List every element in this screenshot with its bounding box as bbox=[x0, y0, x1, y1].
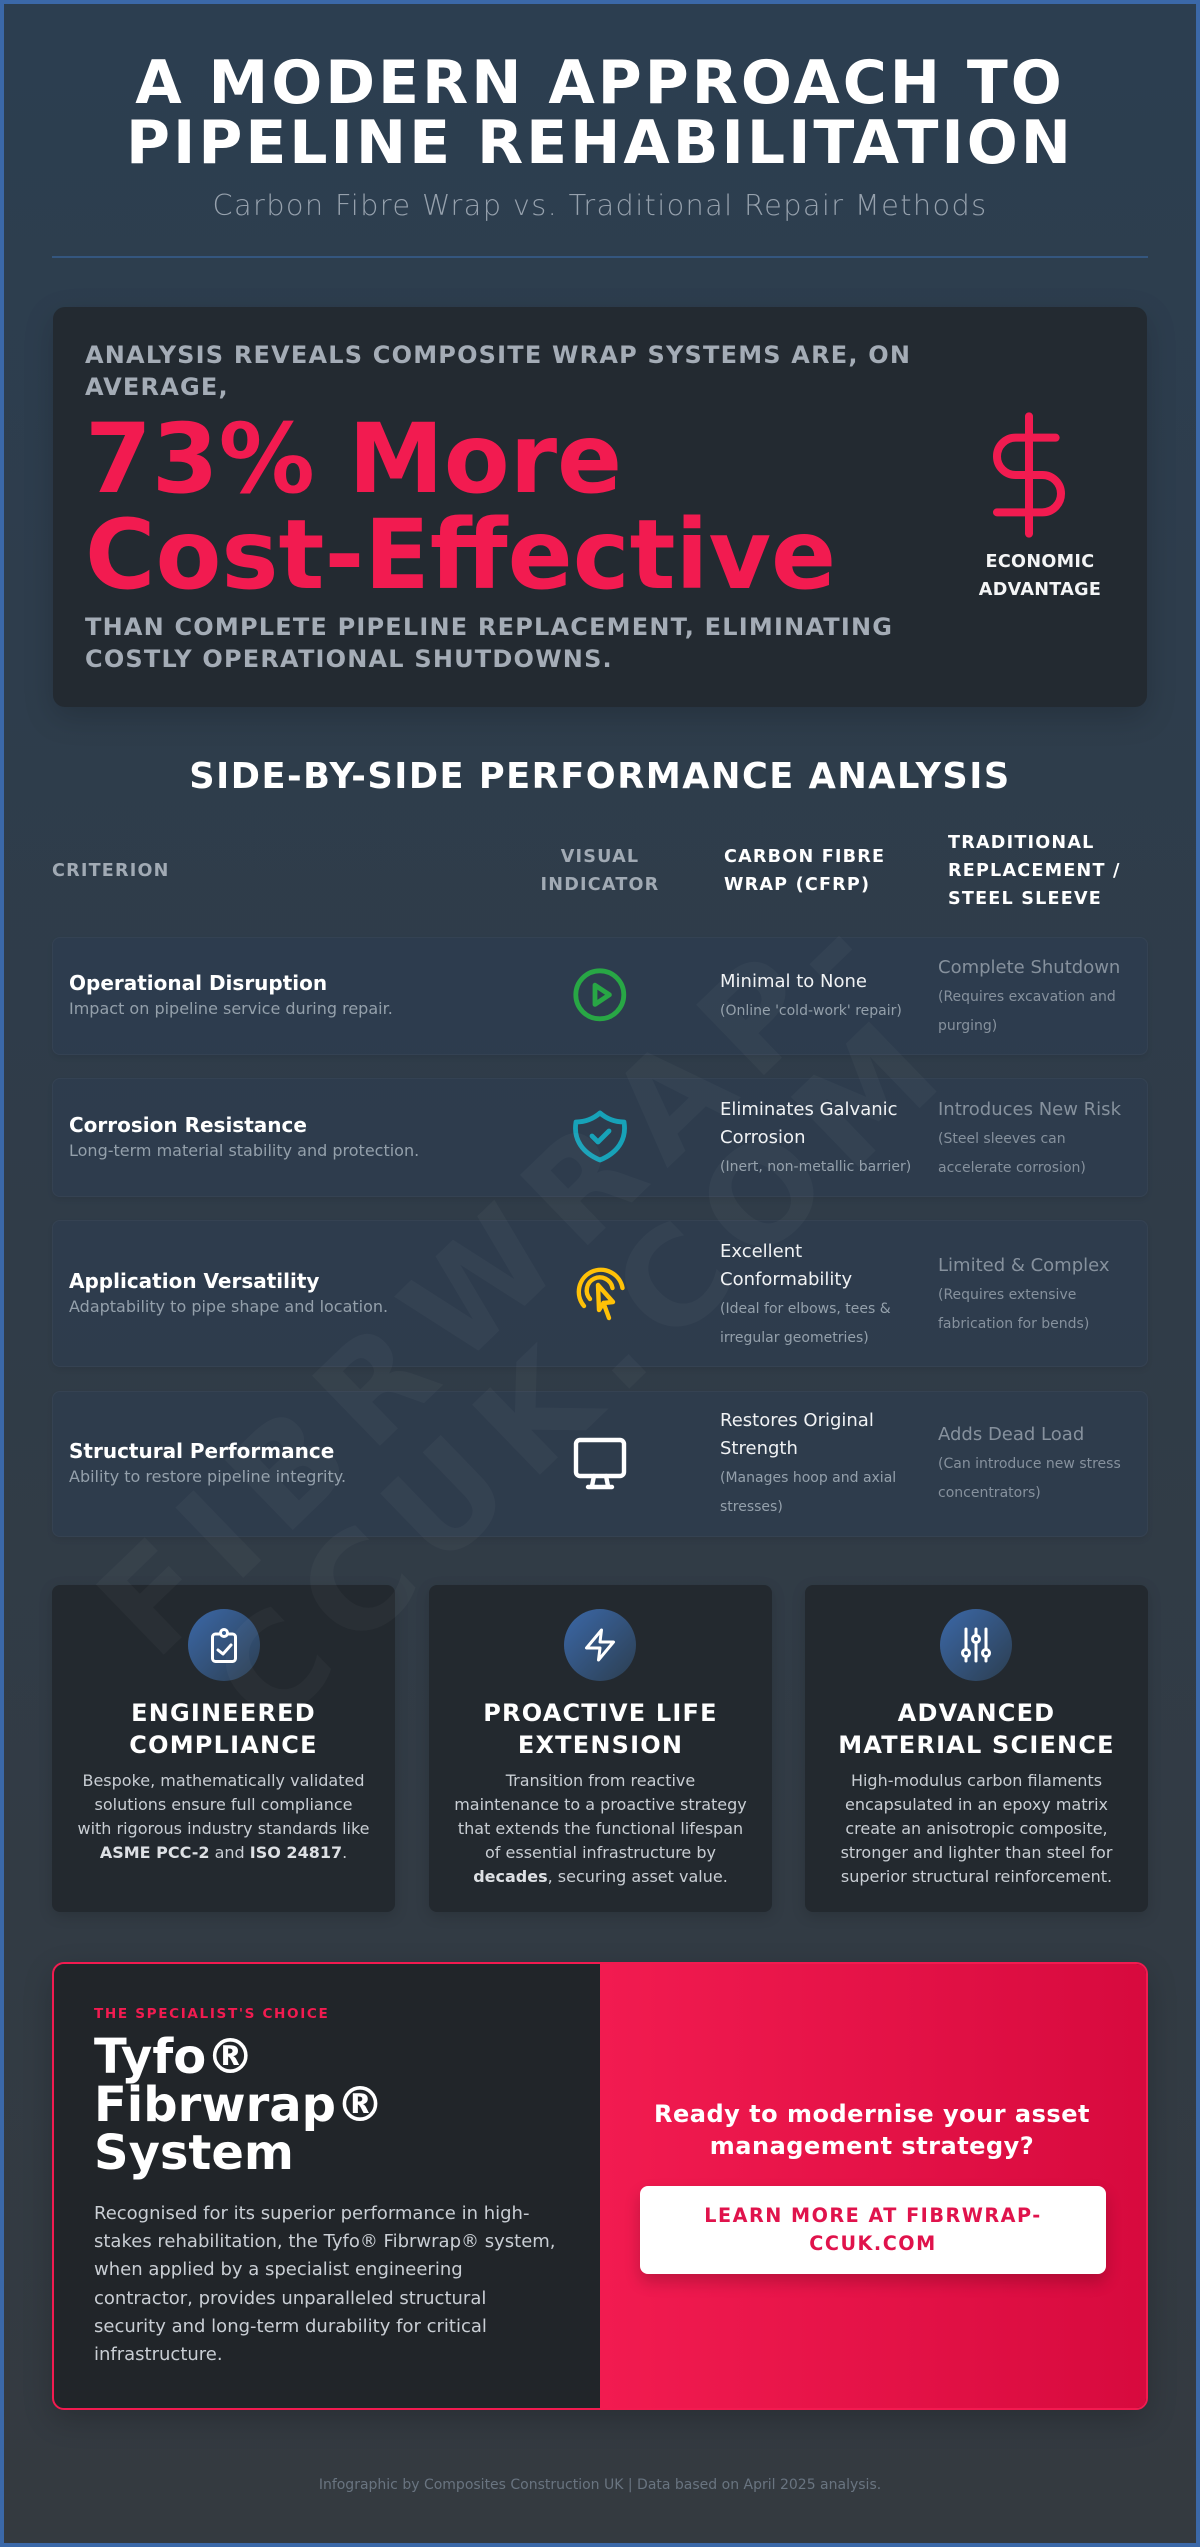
carbon fibre: excellent conformability: (Ideal for elbows, tees & bbox=[720, 1301, 891, 1317]
button: learn more: LEARN MORE AT FIBRWRAP- bbox=[704, 2204, 1042, 2227]
carbon fibre: minimal to none bbox=[720, 971, 902, 1019]
panel: engineered compliance bbox=[52, 1585, 395, 1912]
icon: clipboard check bbox=[188, 1609, 260, 1681]
criterion: structural performance: Ability to restore pipeline integrity. bbox=[69, 1467, 346, 1486]
hero closing text: THAN COMPLETE PIPELINE REPLACEMENT, ELIMINATING bbox=[85, 613, 893, 641]
label: economic advantage: ECONOMIC bbox=[986, 552, 1094, 572]
heading: proactive life extension: EXTENSION bbox=[518, 1731, 683, 1759]
button: learn more: CCUK.COM bbox=[809, 2232, 937, 2255]
criterion: corrosion resistance bbox=[69, 1113, 419, 1160]
table header: visual indicator: INDICATOR bbox=[541, 875, 659, 895]
watermark: FIBRWRAP- bbox=[69, 863, 914, 1686]
product name bbox=[94, 2029, 384, 2181]
body: engineered compliance bbox=[77, 1771, 370, 1862]
footer credit: Infographic by Composites Construction UK | Data based on April 2025 analysis. bbox=[319, 2477, 881, 2493]
body: proactive life extension: that extends the functional lifespan bbox=[458, 1819, 743, 1838]
traditional: adds dead load bbox=[938, 1424, 1121, 1501]
traditional: complete shutdown: purging) bbox=[938, 1018, 997, 1034]
body: advanced material science: stronger and lighter than steel for bbox=[841, 1843, 1112, 1862]
table header: visual indicator: VISUAL bbox=[561, 847, 639, 867]
carbon fibre: restores original strength: Restores Original bbox=[720, 1410, 874, 1431]
product description: Recognised for its superior performance in high- bbox=[94, 2203, 529, 2224]
heading: proactive life extension bbox=[483, 1699, 718, 1759]
icon: cursor click bbox=[576, 1268, 625, 1320]
panel: advanced material science bbox=[805, 1585, 1148, 1912]
table header: visual indicator bbox=[541, 847, 659, 895]
heading: engineered compliance: ENGINEERED bbox=[131, 1699, 316, 1727]
body: engineered compliance: solutions ensure full compliance bbox=[95, 1795, 352, 1814]
product description: when applied by a specialist engineering bbox=[94, 2259, 463, 2280]
traditional: complete shutdown bbox=[938, 957, 1120, 1034]
call to action question: Ready to modernise your asset bbox=[654, 2100, 1090, 2128]
criterion: application versatility: Application Versatility bbox=[69, 1269, 319, 1293]
table header: carbon fibre wrap: WRAP (CFRP) bbox=[724, 875, 870, 895]
traditional: limited and complex: Limited & Complex bbox=[938, 1255, 1110, 1276]
table header: traditional: REPLACEMENT / bbox=[948, 861, 1121, 881]
table header: carbon fibre wrap bbox=[724, 847, 885, 895]
carbon fibre: minimal to none: Minimal to None bbox=[720, 971, 867, 992]
table header: carbon fibre wrap: CARBON FIBRE bbox=[724, 847, 885, 867]
carbon fibre: excellent conformability bbox=[720, 1241, 891, 1346]
carbon fibre: excellent conformability: Conformability bbox=[720, 1269, 852, 1290]
row: corrosion resistance bbox=[52, 1078, 1148, 1197]
carbon fibre: restores original strength: (Manages hoop and axial bbox=[720, 1470, 896, 1486]
traditional: adds dead load: (Can introduce new stress bbox=[938, 1456, 1121, 1472]
eyebrow: the specialist's choice: THE SPECIALIST'S CHOICE bbox=[94, 2006, 329, 2022]
button: learn more bbox=[640, 2186, 1106, 2274]
label: economic advantage: ADVANTAGE bbox=[979, 580, 1101, 600]
product name: Fibrwrap® bbox=[94, 2077, 384, 2133]
row: application versatility bbox=[52, 1220, 1148, 1367]
criterion: structural performance bbox=[69, 1439, 346, 1486]
hero statistic number bbox=[85, 403, 836, 611]
icon: play circle bbox=[573, 968, 626, 1022]
body: advanced material science bbox=[841, 1771, 1112, 1886]
body: engineered compliance: with rigorous industry standards like bbox=[77, 1819, 370, 1838]
criterion: corrosion resistance: Corrosion Resistance bbox=[69, 1113, 307, 1137]
product description: contractor, provides unparalleled structural bbox=[94, 2288, 486, 2309]
carbon fibre: eliminates galvanic corrosion bbox=[720, 1099, 911, 1175]
heading: engineered compliance: COMPLIANCE bbox=[129, 1731, 318, 1759]
label: economic advantage bbox=[978, 552, 1101, 600]
heading: advanced material science: MATERIAL SCIENCE bbox=[838, 1731, 1115, 1759]
panel: hero statistic bbox=[53, 307, 1147, 707]
call to action question: management strategy? bbox=[710, 2132, 1034, 2160]
traditional: introduces new risk bbox=[938, 1099, 1121, 1176]
row: structural performance bbox=[52, 1391, 1148, 1537]
traditional: limited and complex: fabrication for bends) bbox=[938, 1316, 1089, 1332]
call to action question bbox=[654, 2100, 1090, 2160]
body: proactive life extension: Transition from reactive bbox=[506, 1771, 695, 1790]
criterion: operational disruption bbox=[69, 971, 393, 1018]
watermark bbox=[14, 810, 1060, 1834]
heading: performance analysis: SIDE-BY-SIDE PERFORMANCE ANALYSIS bbox=[189, 756, 1011, 797]
traditional: introduces new risk: accelerate corrosion) bbox=[938, 1160, 1086, 1176]
carbon fibre: eliminates galvanic corrosion: (Inert, non-metallic barrier) bbox=[720, 1159, 911, 1175]
title bbox=[126, 48, 1074, 178]
body: proactive life extension: maintenance to a proactive strategy bbox=[454, 1795, 747, 1814]
hero closing text bbox=[85, 613, 893, 673]
panel: Tyfo Fibrwrap call to action bbox=[52, 1962, 1148, 2410]
table header: traditional: STEEL SLEEVE bbox=[948, 889, 1102, 909]
carbon fibre: minimal to none: (Online 'cold-work' repair) bbox=[720, 1003, 902, 1019]
hero statistic number: 73% More bbox=[85, 403, 622, 515]
heading: proactive life extension: PROACTIVE LIFE bbox=[483, 1699, 718, 1727]
carbon fibre: excellent conformability: irregular geometries) bbox=[720, 1330, 869, 1346]
traditional: complete shutdown: (Requires excavation and bbox=[938, 989, 1116, 1005]
hero statistic number: Cost-Effective bbox=[85, 499, 836, 611]
criterion: application versatility: Adaptability to pipe shape and location. bbox=[69, 1297, 388, 1316]
traditional: complete shutdown: Complete Shutdown bbox=[938, 957, 1120, 978]
body: proactive life extension: decades, securing asset value. bbox=[473, 1867, 728, 1886]
title: A MODERN APPROACH TO bbox=[135, 48, 1065, 118]
hero intro text: ANALYSIS REVEALS COMPOSITE WRAP SYSTEMS ARE, ON bbox=[85, 341, 911, 369]
hero intro text bbox=[85, 341, 911, 401]
icon: lightning bolt bbox=[564, 1609, 636, 1681]
carbon fibre: eliminates galvanic corrosion: Eliminates Galvanic bbox=[720, 1099, 898, 1120]
heading: engineered compliance bbox=[129, 1699, 318, 1759]
product description bbox=[94, 2203, 556, 2365]
traditional: introduces new risk: Introduces New Risk bbox=[938, 1099, 1121, 1120]
product description: stakes rehabilitation, the Tyfo® Fibrwrap® system, bbox=[94, 2231, 556, 2252]
table header: criterion: CRITERION bbox=[52, 861, 170, 881]
icon: monitor bbox=[574, 1438, 626, 1490]
row: operational disruption bbox=[52, 937, 1148, 1055]
panel: call to action background bbox=[600, 1964, 1146, 2408]
product description: infrastructure. bbox=[94, 2344, 223, 2365]
body: advanced material science: High-modulus carbon filaments bbox=[851, 1771, 1102, 1790]
heading: advanced material science: ADVANCED bbox=[898, 1699, 1055, 1727]
traditional: limited and complex: (Requires extensive bbox=[938, 1287, 1076, 1303]
criterion: corrosion resistance: Long-term material stability and protection. bbox=[69, 1141, 419, 1160]
product name: Tyfo® bbox=[94, 2029, 254, 2085]
body: advanced material science: superior structural reinforcement. bbox=[841, 1867, 1112, 1886]
product name: System bbox=[94, 2125, 294, 2181]
hero closing text: COSTLY OPERATIONAL SHUTDOWNS. bbox=[85, 645, 613, 673]
traditional: limited and complex bbox=[938, 1255, 1110, 1332]
body: proactive life extension bbox=[454, 1771, 747, 1886]
criterion: structural performance: Structural Performance bbox=[69, 1439, 334, 1463]
criterion: operational disruption: Impact on pipeline service during repair. bbox=[69, 999, 393, 1018]
carbon fibre: excellent conformability: Excellent bbox=[720, 1241, 802, 1262]
traditional: adds dead load: Adds Dead Load bbox=[938, 1424, 1084, 1445]
icon: dollar sign bbox=[993, 412, 1065, 538]
carbon fibre: restores original strength: stresses) bbox=[720, 1499, 783, 1515]
criterion: application versatility bbox=[69, 1269, 388, 1316]
table header: traditional bbox=[948, 833, 1121, 909]
body: proactive life extension: of essential infrastructure by bbox=[485, 1843, 716, 1862]
hero intro text: AVERAGE, bbox=[85, 373, 229, 401]
heading: advanced material science bbox=[838, 1699, 1115, 1759]
carbon fibre: eliminates galvanic corrosion: Corrosion bbox=[720, 1127, 805, 1148]
carbon fibre: restores original strength bbox=[720, 1410, 896, 1515]
title: PIPELINE REHABILITATION bbox=[126, 108, 1074, 178]
body: advanced material science: encapsulated in an epoxy matrix bbox=[845, 1795, 1108, 1814]
watermark: CCUK.COM bbox=[184, 981, 982, 1758]
icon: sliders bbox=[940, 1609, 1012, 1681]
panel: proactive life extension bbox=[429, 1585, 772, 1912]
icon: shield check bbox=[573, 1110, 627, 1162]
product description: security and long-term durability for critical bbox=[94, 2316, 487, 2337]
body: engineered compliance: Bespoke, mathematically validated bbox=[82, 1771, 364, 1790]
body: engineered compliance: ASME PCC-2 and ISO 24817. bbox=[100, 1843, 347, 1862]
body: advanced material science: create an anisotropic composite, bbox=[845, 1819, 1108, 1838]
criterion: operational disruption: Operational Disruption bbox=[69, 971, 327, 995]
table header: traditional: TRADITIONAL bbox=[948, 833, 1095, 853]
carbon fibre: restores original strength: Strength bbox=[720, 1438, 798, 1459]
traditional: introduces new risk: (Steel sleeves can bbox=[938, 1131, 1066, 1147]
traditional: adds dead load: concentrators) bbox=[938, 1485, 1041, 1501]
subtitle: Carbon Fibre Wrap vs. Traditional Repair Methods bbox=[213, 188, 987, 222]
